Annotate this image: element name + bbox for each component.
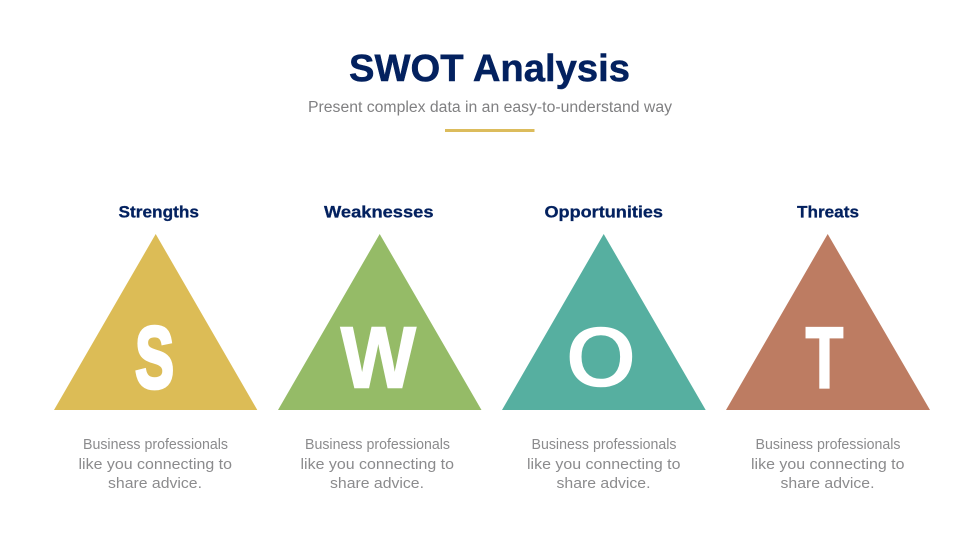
- heading: Strengths: Strengths: [118, 202, 199, 222]
- panel: threats: [726, 202, 930, 492]
- description: threats: Business professionals: [756, 436, 901, 453]
- triangle: opportunities: [502, 234, 706, 410]
- description: strengths: share advice.: [108, 476, 202, 492]
- title underline accent: [445, 129, 534, 132]
- letter S: S: [135, 309, 174, 406]
- panel: weaknesses: [278, 202, 482, 492]
- heading: Opportunities: Opportunities: [544, 202, 663, 222]
- description: strengths: like you connecting to: [78, 457, 232, 473]
- heading: Weaknesses: Weaknesses: [324, 202, 434, 222]
- description: threats: share advice.: [780, 476, 874, 492]
- letter T: T: [806, 310, 843, 408]
- description: weaknesses: share advice.: [330, 476, 424, 492]
- letter O: O: [565, 309, 637, 406]
- description: opportunities: Business professionals: [532, 436, 677, 453]
- triangle: strengths: [54, 234, 257, 410]
- panel: strengths: [54, 202, 257, 492]
- description: opportunities: share advice.: [556, 476, 650, 492]
- letter W: W: [341, 308, 416, 406]
- heading: Threats: Threats: [797, 202, 859, 222]
- description: opportunities: [527, 436, 680, 492]
- triangle: weaknesses: [278, 234, 482, 410]
- description: weaknesses: [300, 436, 454, 492]
- triangle: threats: [726, 234, 930, 410]
- description: opportunities: like you connecting to: [527, 457, 680, 473]
- title: SWOT Analysis: [349, 48, 630, 90]
- subtitle: Present complex data in an easy-to-understand way: [308, 99, 672, 116]
- description: strengths: Business professionals: [83, 436, 228, 453]
- description: weaknesses: like you connecting to: [300, 457, 454, 473]
- panel: opportunities: [502, 202, 706, 492]
- description: threats: like you connecting to: [751, 457, 904, 473]
- description: threats: [751, 436, 904, 492]
- description: strengths: [78, 436, 232, 492]
- description: weaknesses: Business professionals: [305, 436, 450, 453]
